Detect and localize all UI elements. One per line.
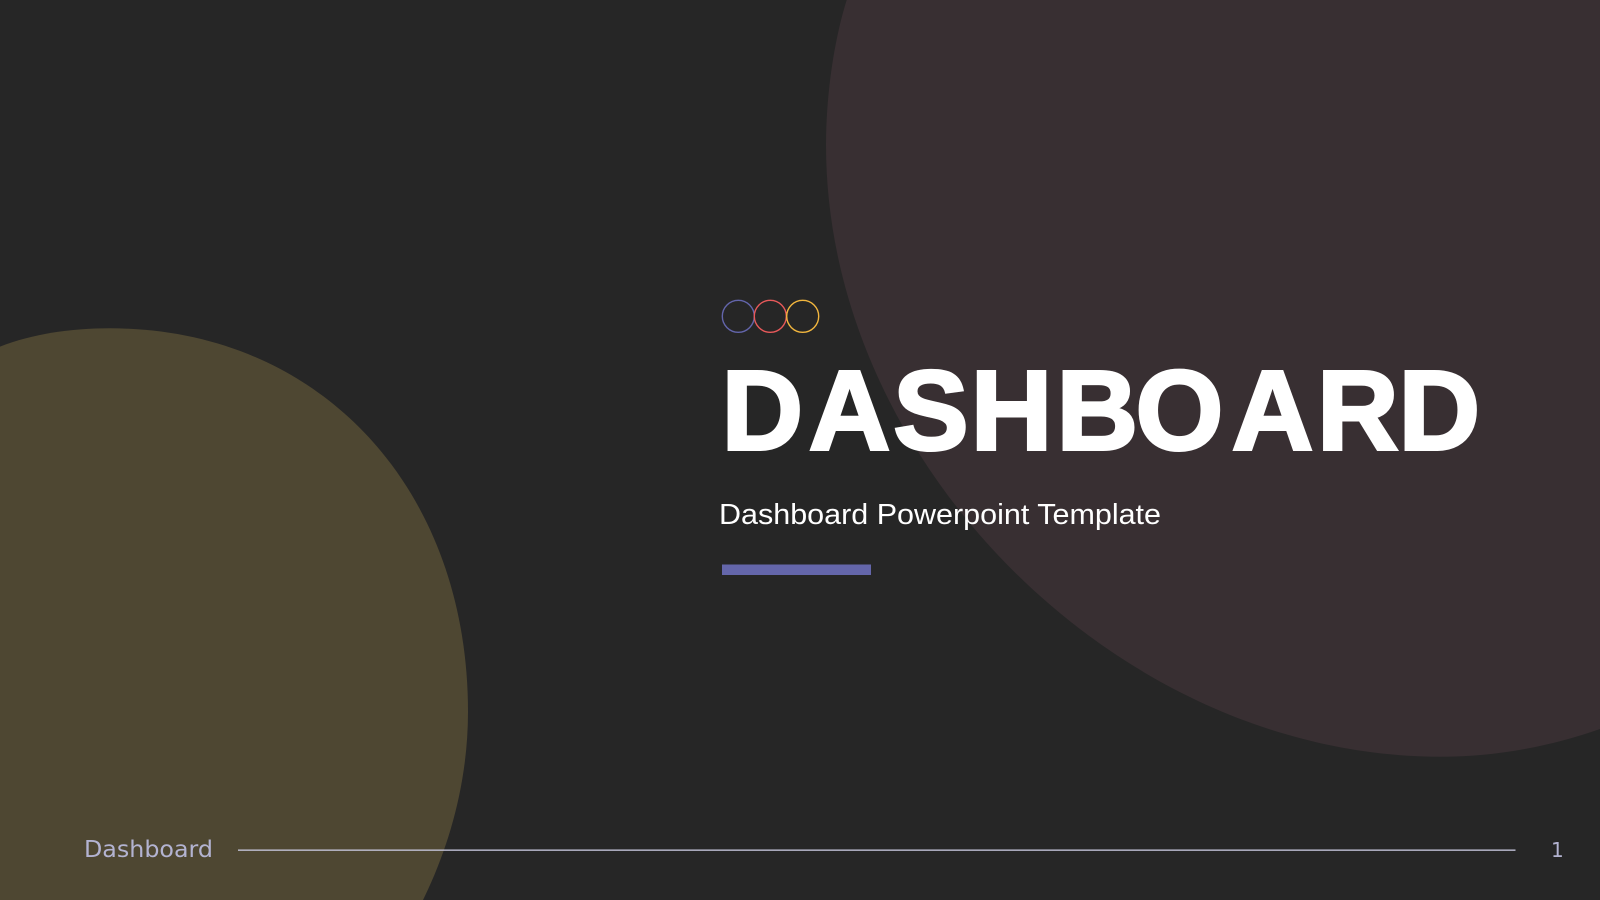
accent bar: [722, 564, 871, 575]
footer rule: [238, 850, 1516, 851]
icon: three outlined circles: [722, 300, 819, 332]
footer label: Dashboard: [84, 837, 213, 863]
subtitle: Dashboard Powerpoint Template: [719, 499, 1161, 531]
large background circle: top right: [826, 0, 1600, 757]
large background circle: bottom left: [0, 328, 468, 900]
title: DASHBOARD: [722, 348, 1480, 474]
page number: 1: [1551, 838, 1564, 862]
